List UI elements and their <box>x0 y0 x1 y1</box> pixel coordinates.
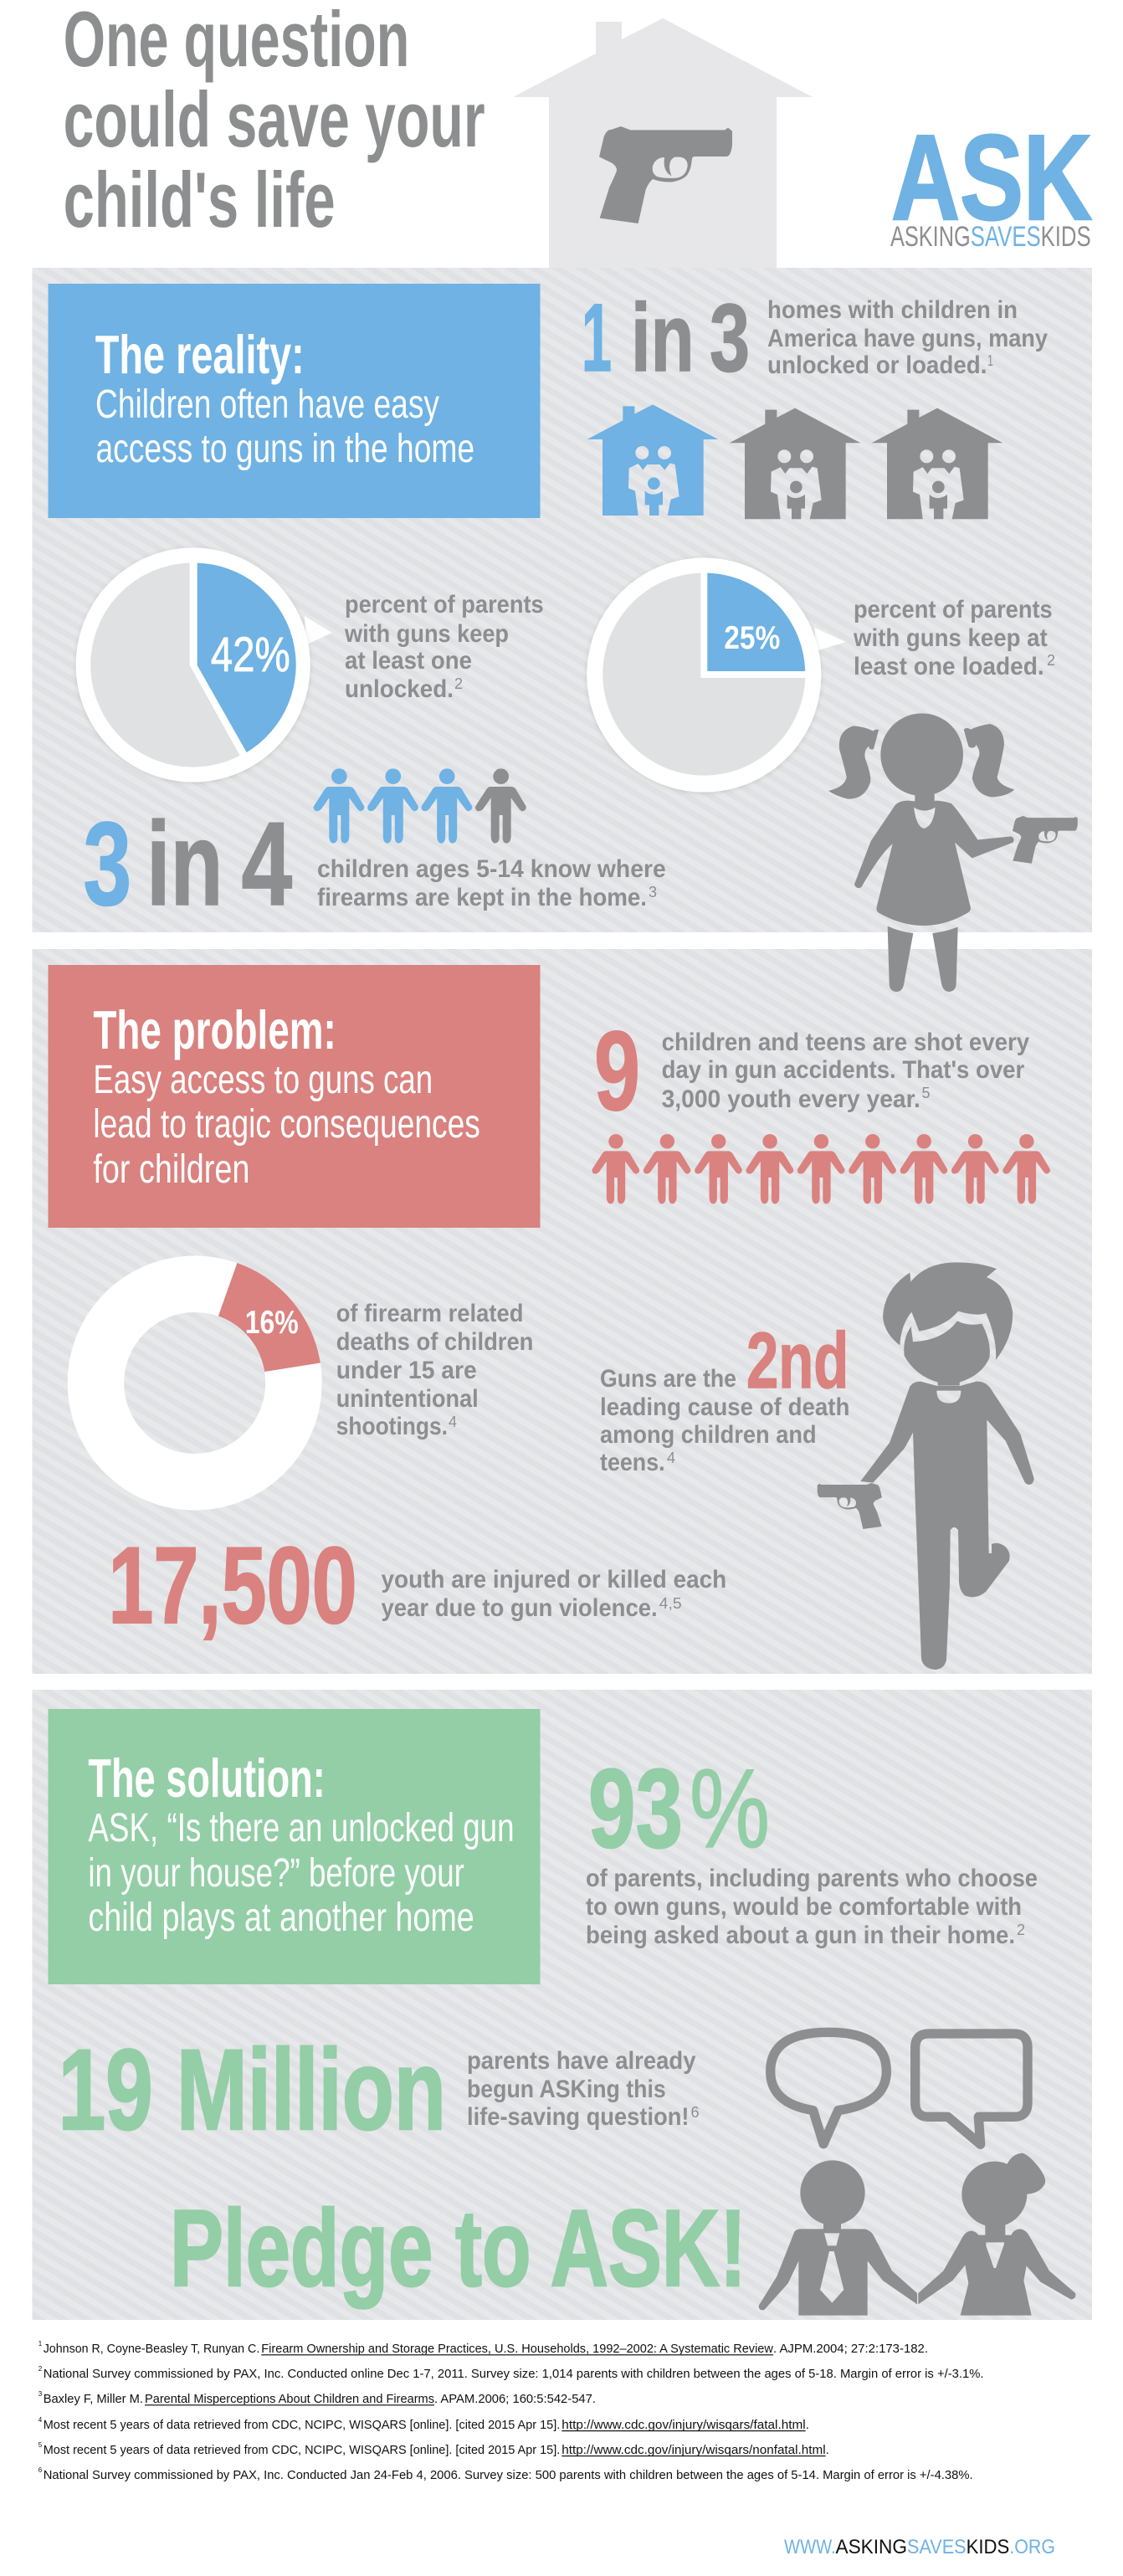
footnotes: 2 <box>38 2365 43 2373</box>
footnotes <box>38 2340 984 2482</box>
pie caption: 42%: unlocked. <box>345 675 454 703</box>
1 in 3 stat: 3 <box>710 285 750 392</box>
footnotes: 5 <box>38 2441 43 2449</box>
93% stat: % <box>690 1747 770 1871</box>
children text: 3 <box>649 884 657 901</box>
homes text: 1 <box>987 352 993 369</box>
donut caption: shootings. <box>336 1413 448 1440</box>
2nd leading cause stat: 2nd <box>746 1316 849 1405</box>
ASK logo: SAVES <box>971 221 1041 253</box>
pie caption: 25% <box>853 596 1055 680</box>
ASK logo: ASKING <box>890 221 971 253</box>
reality heading box: access to guns in the home <box>95 427 474 471</box>
header gun icon <box>599 126 732 223</box>
footnotes: http://www.cdc.gov/injury/wisqars/nonfatal.html <box>562 2443 826 2457</box>
icon: man and woman holding hands <box>759 2153 1075 2316</box>
parents asking text: begun ASKing this <box>467 2076 666 2103</box>
reality heading box <box>49 284 541 518</box>
problem heading box: lead to tragic consequences <box>93 1102 480 1147</box>
2nd leading cause stat: teens. <box>600 1449 665 1476</box>
solution heading box <box>49 1709 541 1984</box>
footnotes: 3 <box>38 2390 43 2398</box>
pie chart: 25% <box>587 557 846 792</box>
footnotes: 4 <box>38 2416 43 2424</box>
donut caption: deaths of children <box>336 1328 533 1356</box>
donut caption: of firearm related <box>336 1300 524 1327</box>
parents comfortable text <box>586 1865 1038 1949</box>
93% stat: 93 <box>588 1747 683 1871</box>
parents asking text: life-saving question! <box>467 2103 690 2131</box>
panel: the solution <box>32 1690 1092 2320</box>
parents comfortable text: to own guns, would be comfortable with <box>586 1893 1022 1921</box>
footnotes: Baxley F, Miller M. <box>44 2392 143 2406</box>
17,500 stat: 17,500 <box>108 1524 357 1646</box>
footnotes: National Survey commissioned by PAX, Inc. Conducted online Dec 1-7, 2011. Survey size: 1,014 parents with children between the ages of 5-18. Margin of error is +/-3.1%. <box>44 2367 984 2381</box>
footnotes: http://www.cdc.gov/injury/wisqars/fatal.html <box>562 2418 806 2432</box>
donut chart: 16% <box>68 1255 322 1510</box>
title <box>64 0 485 244</box>
2nd leading cause stat <box>600 1316 849 1476</box>
reality heading box: The reality: <box>95 324 305 385</box>
pie caption: 25%: least one loaded. <box>854 653 1044 680</box>
footnotes: Most recent 5 years of data retrieved from CDC, NCIPC, WISQARS [online]. [cited 2015 Apr 15]. <box>44 2443 560 2457</box>
icon: nine children <box>592 1134 1050 1203</box>
donut caption: under 15 are <box>336 1357 477 1384</box>
website URL: SAVES <box>907 2536 967 2558</box>
footnotes: . <box>806 2418 809 2432</box>
3 in 4 stat: in <box>146 798 223 931</box>
solution heading box: child plays at another home <box>88 1896 474 1940</box>
homes text: unlocked or loaded. <box>767 352 987 379</box>
solution heading box: The solution: <box>88 1747 326 1809</box>
3 in 4 stat <box>84 798 292 931</box>
footnotes: Firearm Ownership and Storage Practices, U.S. Households, 1992–2002: A Systematic Review <box>261 2342 773 2356</box>
homes text: America have guns, many <box>767 325 1048 352</box>
pie caption: 25%: with guns keep at <box>853 624 1048 652</box>
website URL <box>784 2536 1055 2558</box>
parents comfortable text: 2 <box>1017 1922 1025 1938</box>
pie chart: 42% <box>76 547 332 782</box>
problem heading box: for children <box>93 1147 249 1192</box>
pie caption: 42%: with guns keep <box>344 620 509 648</box>
2nd leading cause stat: leading cause of death <box>600 1393 849 1421</box>
parents comfortable text: being asked about a gun in their home. <box>586 1922 1015 1949</box>
donut caption: unintentional <box>336 1385 479 1413</box>
problem heading box <box>49 965 541 1228</box>
footnotes: Most recent 5 years of data retrieved from CDC, NCIPC, WISQARS [online]. [cited 2015 Apr 15]. <box>44 2418 560 2432</box>
website URL: WWW. <box>784 2536 836 2558</box>
2nd leading cause stat: Guns are the <box>600 1365 736 1393</box>
footnotes: 6 <box>38 2466 43 2474</box>
header house <box>513 18 813 268</box>
website URL: ASKING <box>835 2536 907 2558</box>
parents asking text <box>467 2047 700 2131</box>
shot every day text: 3,000 youth every year. <box>662 1085 920 1113</box>
shot every day text: day in gun accidents. That's over <box>662 1056 1024 1084</box>
footnotes: . <box>826 2443 829 2457</box>
children text <box>317 855 666 911</box>
donut caption: 4 <box>449 1414 457 1430</box>
youth injured text: youth are injured or killed each <box>382 1566 726 1593</box>
footnotes: National Survey commissioned by PAX, Inc. Conducted Jan 24-Feb 4, 2006. Survey size: 500 parents with children between the ages of 5-14. Margin of error is +/-4.38%. <box>44 2468 973 2482</box>
pie chart: 25%: 25% <box>724 620 780 656</box>
footnotes: 1 <box>38 2340 43 2348</box>
icon: blue house with family <box>587 404 718 516</box>
pie chart: 42%: 42% <box>211 628 290 682</box>
panel: the reality <box>32 268 1092 932</box>
icon: two speech bubbles <box>771 2032 1028 2144</box>
2nd leading cause stat: among children and <box>600 1421 817 1449</box>
problem heading box: Easy access to guns can <box>93 1058 433 1102</box>
Pledge to ASK call to action: Pledge to ASK! <box>170 2187 746 2309</box>
shot every day text: 5 <box>922 1085 931 1101</box>
pie caption: 25%: 2 <box>1047 652 1055 669</box>
3 in 4 stat: 4 <box>241 798 292 931</box>
pie caption: 42%: 2 <box>454 675 463 692</box>
icon: girl with gun <box>828 713 1078 992</box>
solution heading box: ASK, “Is there an unlocked gun <box>88 1806 515 1850</box>
ASK logo: KIDS <box>1041 221 1091 253</box>
footnotes: . AJPM.2004; 27:2:173-182. <box>773 2342 928 2356</box>
parents asking text: 6 <box>691 2104 700 2121</box>
reality heading box: Children often have easy <box>95 382 439 427</box>
footnotes: . APAM.2006; 160:5:542-547. <box>434 2392 596 2406</box>
pie caption: 42%: at least one <box>345 647 472 675</box>
youth injured text <box>382 1566 726 1622</box>
children text: firearms are kept in the home. <box>317 884 647 911</box>
panel: the problem <box>32 949 1092 1674</box>
homes text: homes with children in <box>767 296 1018 324</box>
icon: boy with gun <box>818 1262 1034 1670</box>
shot every day text <box>662 1029 1029 1113</box>
pie caption: 42% <box>344 591 544 703</box>
footnotes: Johnson R, Coyne-Beasley T, Runyan C. <box>44 2342 259 2356</box>
website URL: .ORG <box>1009 2536 1055 2558</box>
93% stat <box>588 1747 770 1871</box>
website URL: KIDS <box>967 2536 1009 2558</box>
parents comfortable text: of parents, including parents who choose <box>586 1865 1038 1892</box>
pie caption: 25%: percent of parents <box>854 596 1053 623</box>
solution heading box: in your house?” before your <box>88 1851 464 1896</box>
shot every day text: children and teens are shot every <box>662 1029 1029 1056</box>
icon: gray house with family <box>872 408 1002 519</box>
problem heading box: The problem: <box>93 999 336 1060</box>
1 in 3 stat: 1 <box>582 285 612 392</box>
parents asking text: parents have already <box>467 2047 696 2075</box>
youth injured text: year due to gun violence. <box>382 1594 658 1622</box>
donut caption <box>336 1300 533 1440</box>
1 in 3 stat: in <box>631 285 695 392</box>
title: child's life <box>64 156 336 244</box>
footnotes: Parental Misperceptions About Children and Firearms <box>145 2392 434 2406</box>
children text: children ages 5-14 know where <box>317 855 666 883</box>
donut chart: 16%: 16% <box>245 1305 299 1341</box>
3 in 4 stat: 3 <box>84 798 131 931</box>
pie caption: 42%: percent of parents <box>345 591 544 618</box>
title: could save your <box>64 75 485 163</box>
9 stat: 9 <box>594 1008 640 1134</box>
icon: four children <box>314 768 526 844</box>
homes text <box>767 296 1048 379</box>
1 in 3 stat <box>582 285 750 392</box>
youth injured text: 4,5 <box>659 1595 682 1612</box>
2nd leading cause stat: 4 <box>667 1450 675 1466</box>
19 Million stat: 19 Million <box>59 2026 446 2154</box>
icon: gray house with family <box>730 408 860 519</box>
